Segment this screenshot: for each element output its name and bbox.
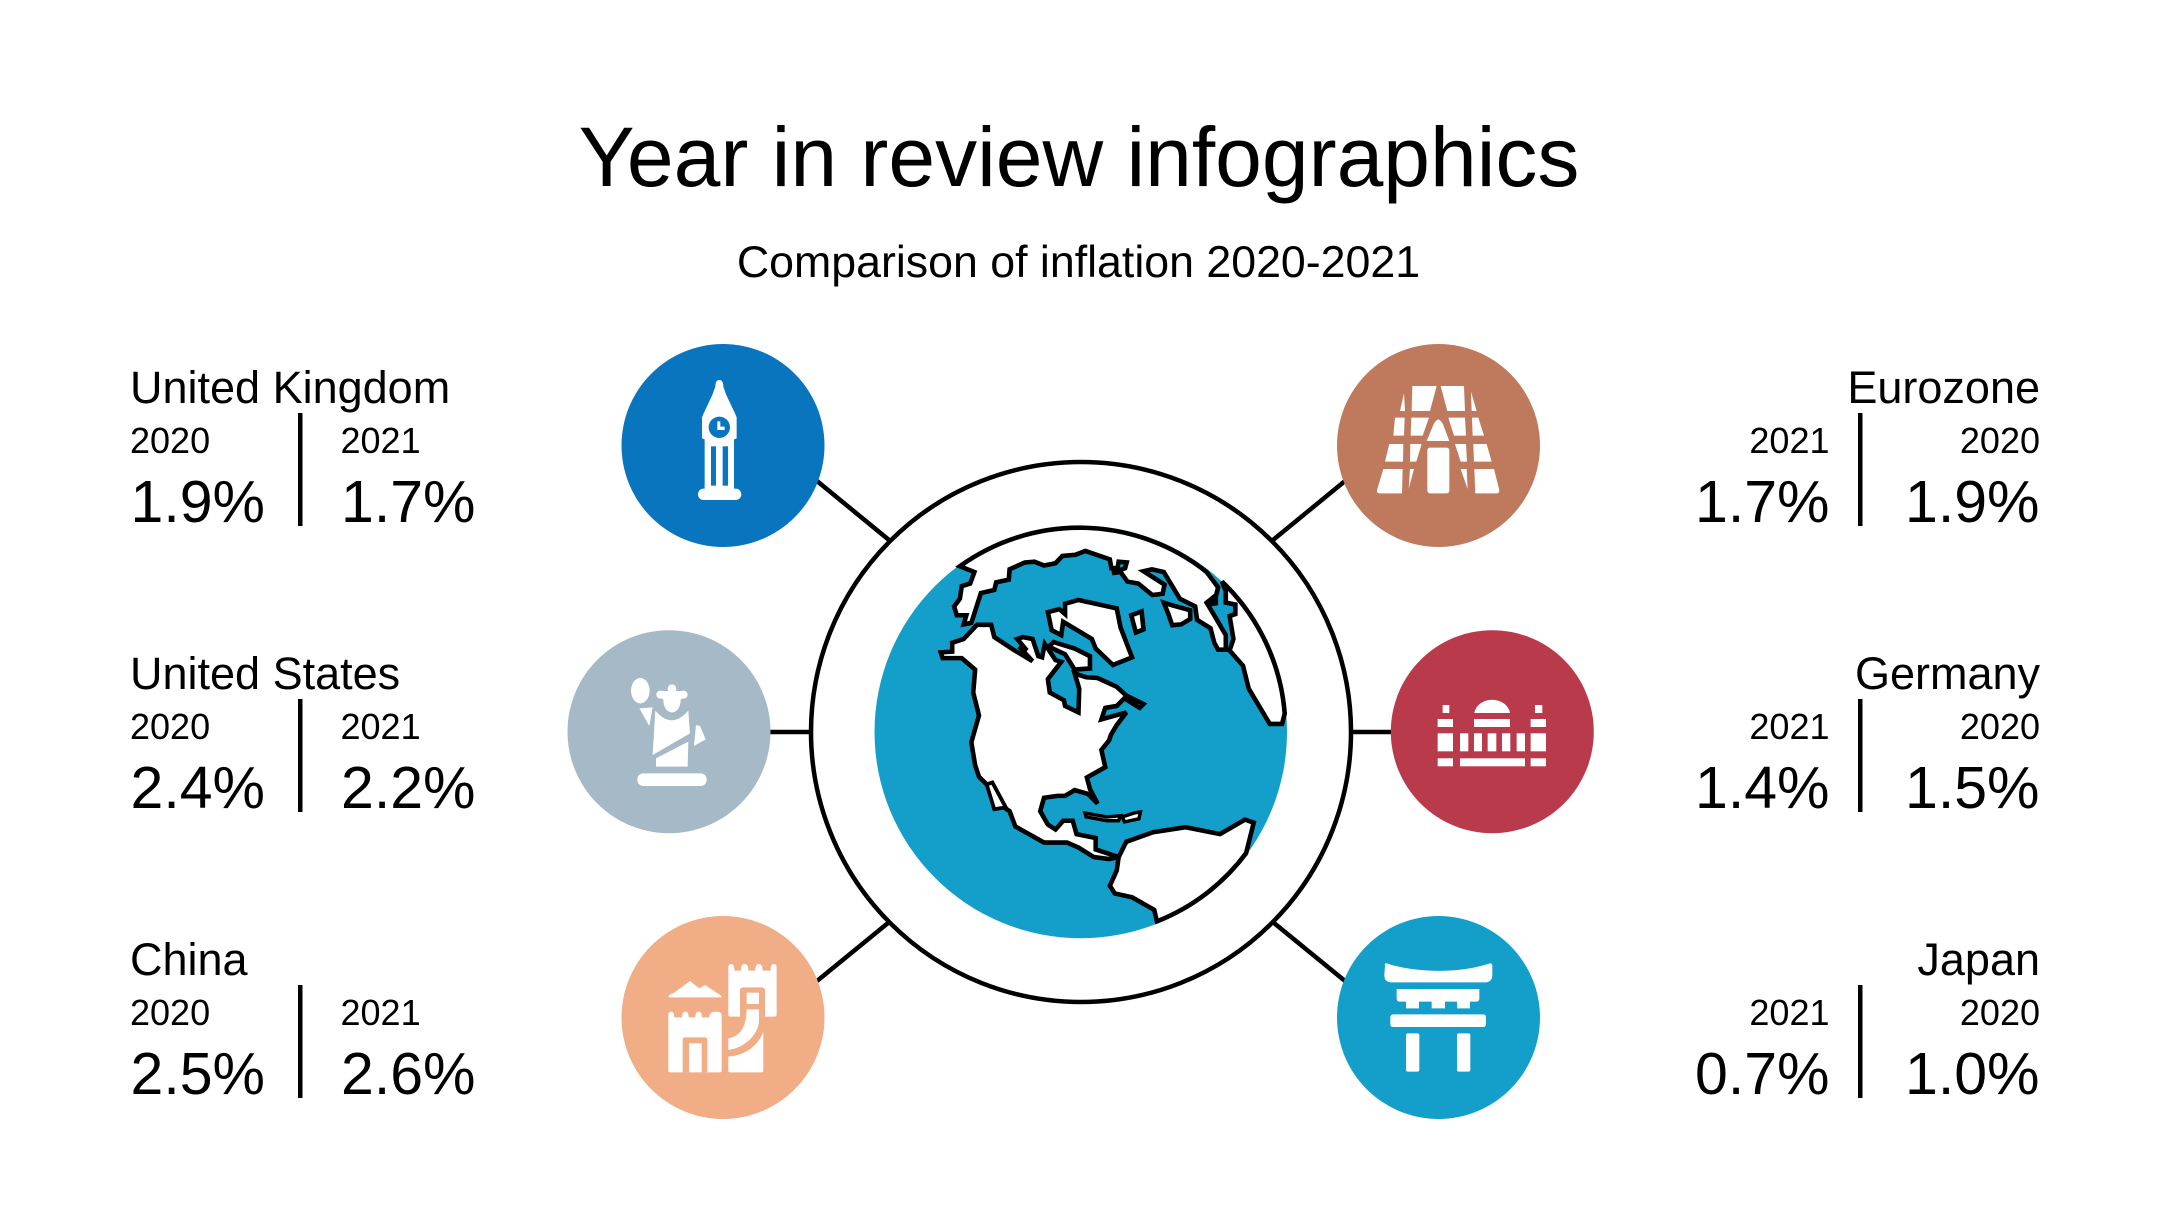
baffin island [1048, 600, 1132, 665]
panel: United Kingdom [130, 362, 475, 535]
north america [941, 625, 1144, 859]
circle icon: China great wall [622, 916, 824, 1119]
panel: Eurozone: 1.7% [1695, 469, 1830, 535]
panel: China: 2.5% [130, 1041, 265, 1107]
panel: Japan: 2020 [1960, 992, 2040, 1033]
circle icon: Japan torii gate [1337, 916, 1540, 1119]
panel: Japan: 1.0% [1905, 1041, 2040, 1107]
panel: Japan: Japan [1917, 934, 2040, 985]
panel: China [130, 934, 475, 1107]
panel: Germany: 1.4% [1695, 755, 1830, 821]
arctic land [954, 528, 1226, 650]
small island [1131, 611, 1144, 632]
title: Year in review infographics [579, 110, 1579, 204]
panel: Germany: 1.5% [1905, 755, 2040, 821]
panel: China: China [130, 934, 249, 985]
panel: Eurozone: 2021 [1749, 420, 1830, 461]
baja california [987, 782, 1006, 809]
circle icon: United Kingdom clock tower [622, 344, 824, 547]
south america [1110, 820, 1254, 921]
circle icon: United States statue of liberty [568, 630, 770, 833]
panel: United Kingdom: 2021 [340, 420, 421, 461]
dark coastal patch [1208, 596, 1218, 606]
panel: United Kingdom: 1.9% [130, 469, 265, 535]
panel: United States: 2020 [130, 706, 210, 747]
circle icon: Eurozone tower [1337, 344, 1540, 547]
panel: United States: 2021 [340, 706, 421, 747]
globe [875, 526, 1287, 938]
ocean [875, 526, 1287, 938]
panel: United States: 2.2% [341, 755, 475, 821]
panel: Eurozone: 1.9% [1905, 469, 2040, 535]
panel: China: 2020 [130, 992, 210, 1033]
panel: China: 2021 [340, 992, 421, 1033]
panel: Germany: Germany [1855, 648, 2040, 699]
caribbean islands [1085, 813, 1121, 821]
panel: Eurozone [1695, 362, 2040, 535]
panel: United Kingdom: 2020 [130, 420, 210, 461]
panel: Eurozone: Eurozone [1847, 362, 2040, 413]
connector lines [768, 481, 1393, 981]
hudson strait land [1049, 642, 1090, 670]
panel: Germany: 2020 [1960, 706, 2040, 747]
panel: United Kingdom: 1.7% [341, 469, 475, 535]
subtitle: Comparison of inflation 2020-2021 [737, 238, 1420, 287]
panel: United Kingdom: United Kingdom [130, 362, 450, 413]
panel: Japan: 2021 [1749, 992, 1830, 1033]
land masses [941, 528, 1285, 921]
europe and africa [1222, 582, 1285, 724]
panel: Japan: 0.7% [1695, 1041, 1830, 1107]
panel: Germany [1695, 648, 2040, 821]
panel: Germany: 2021 [1749, 706, 1830, 747]
panel: Eurozone: 2020 [1960, 420, 2040, 461]
panel: Japan [1695, 934, 2040, 1107]
outer globe ring [811, 462, 1351, 1002]
panel: China: 2.6% [341, 1041, 475, 1107]
circle icon: Germany reichstag [1391, 630, 1594, 833]
panel: United States: United States [130, 648, 400, 699]
small northern island [1164, 603, 1190, 625]
panel: United States: 2.4% [130, 755, 265, 821]
panel: United States [130, 648, 475, 821]
